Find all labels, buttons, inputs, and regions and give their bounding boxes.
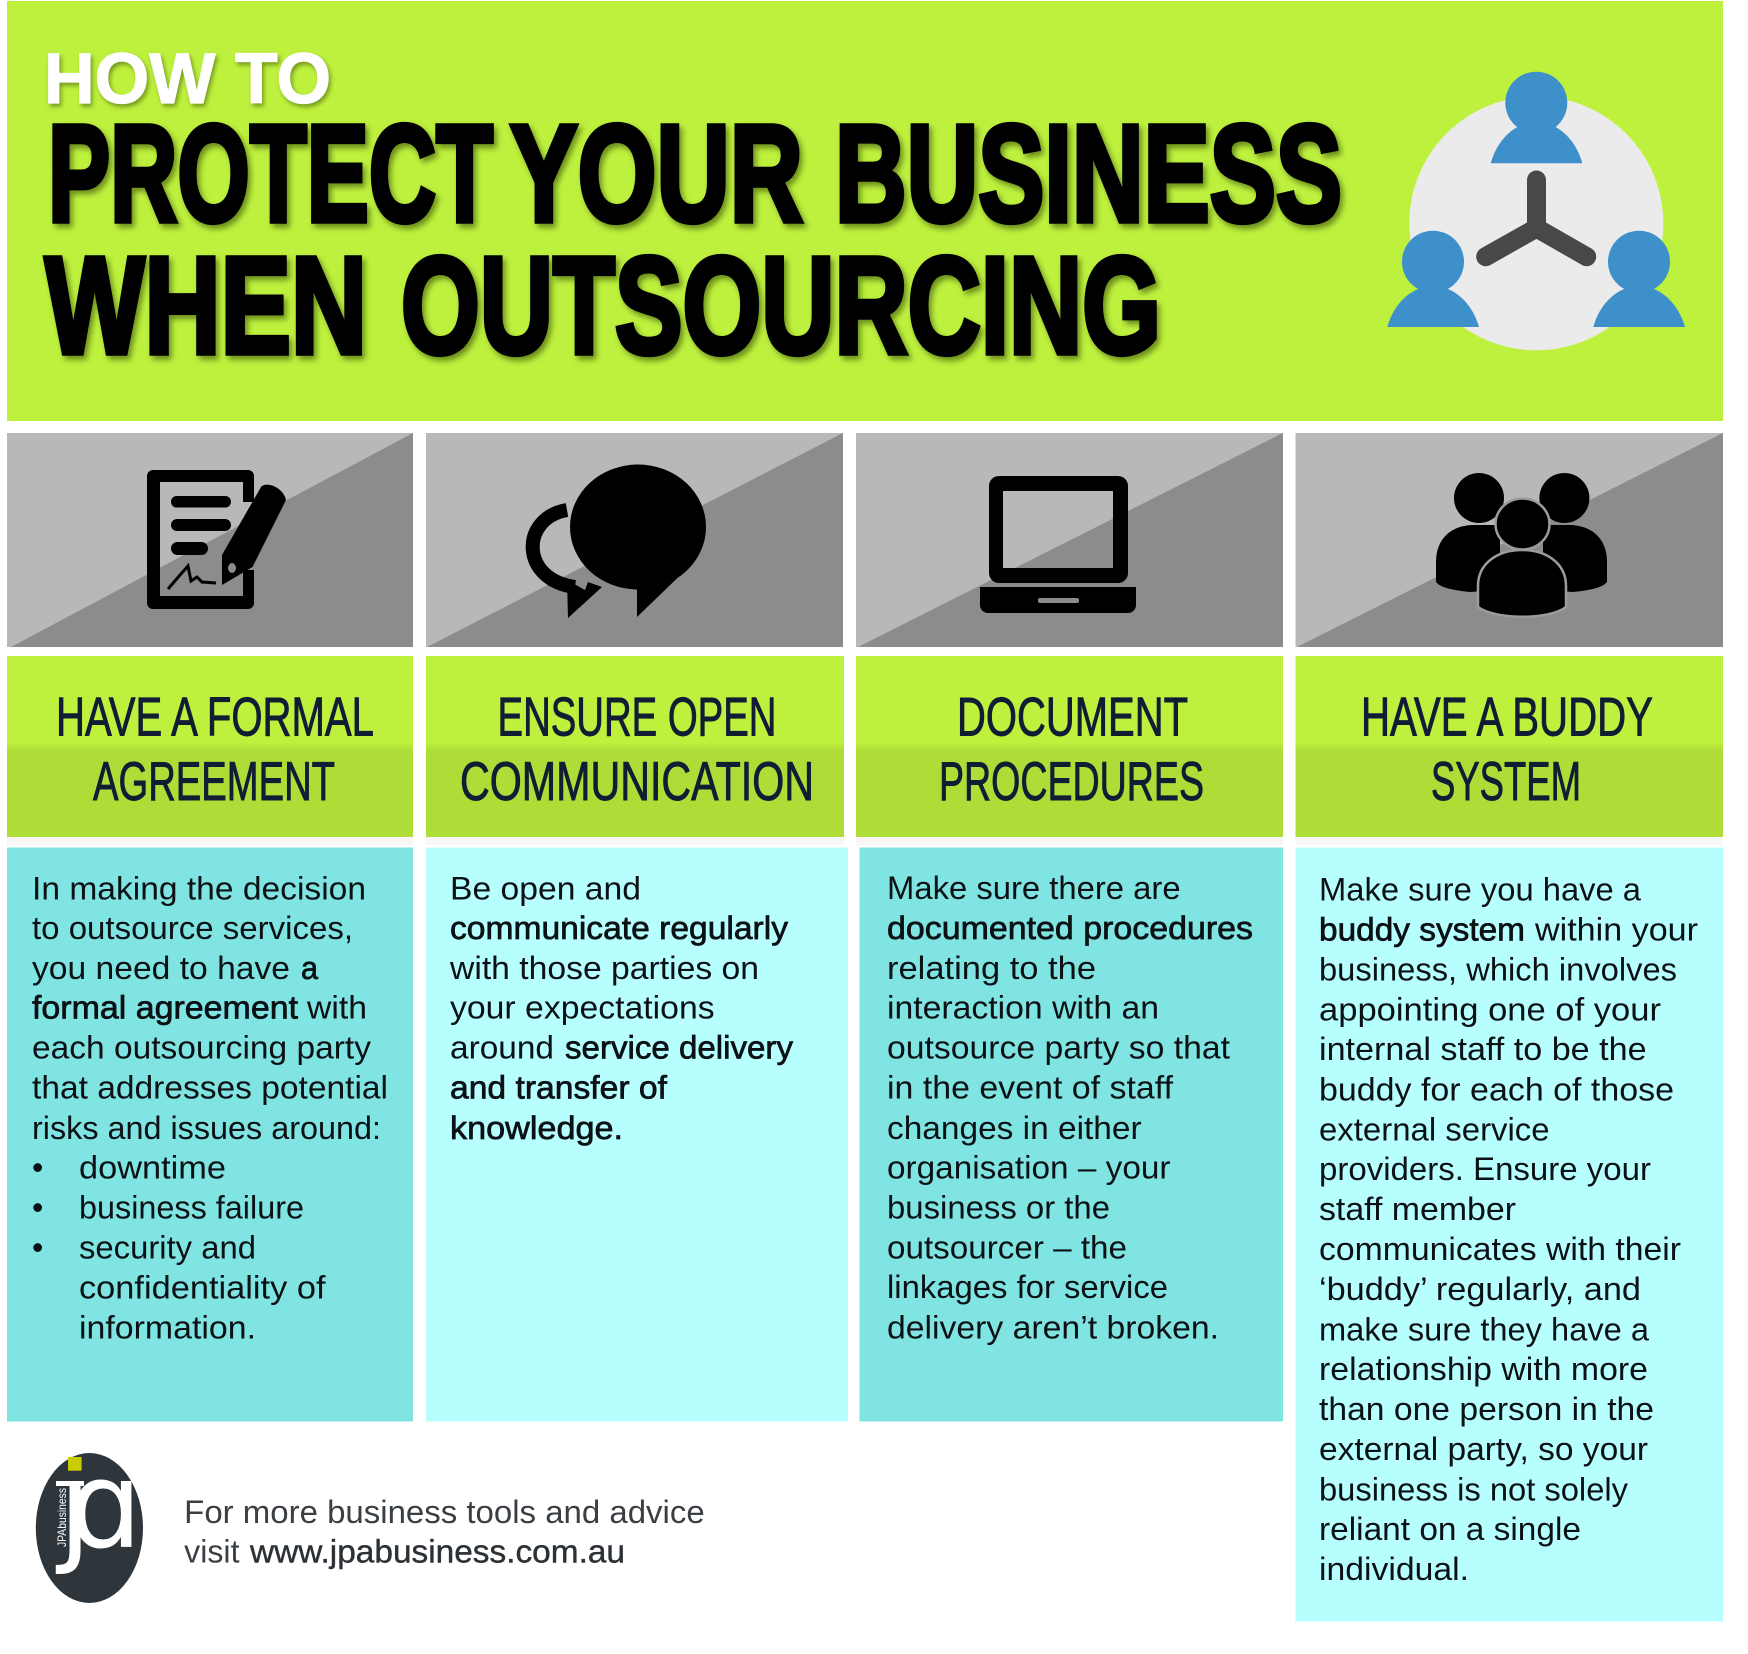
panel: document procedures text: outsource party so that: [887, 1029, 1230, 1065]
icon: group of people: [1436, 473, 1607, 617]
panel: open communication text: knowledge.: [450, 1110, 623, 1146]
panel: open communication text: your expectations: [450, 990, 715, 1026]
panel: open communication text: communicate regularly: [450, 910, 789, 946]
icon: signed document with pen: [147, 470, 286, 609]
panel: buddy system text: buddy system: [1319, 912, 1525, 948]
panel: buddy system text: individual.: [1319, 1551, 1469, 1587]
panel: buddy system text: within your: [1534, 912, 1698, 948]
panel: formal agreement text: a: [301, 950, 319, 986]
icon: laptop: [980, 476, 1136, 613]
panel: formal agreement text: each outsourcing party: [32, 1029, 372, 1065]
panel: formal agreement text: that addresses potential: [32, 1070, 388, 1106]
title: protect your business when outsourcing: OUTSOURCING: [401, 229, 1161, 383]
panel: buddy system text: ‘buddy’ regularly, and: [1319, 1271, 1641, 1307]
panel: buddy system text: appointing one of your: [1319, 991, 1661, 1027]
panel: buddy system text: make sure they have a: [1319, 1311, 1650, 1347]
logo: JPA business: j: [55, 1439, 92, 1578]
panel: document procedures text: documented procedures: [887, 910, 1253, 946]
panel: icon tile agreement: [7, 433, 413, 647]
title kicker: HOW TO: HOW TO: [44, 40, 331, 119]
panel: heading ensure open communication: ENSURE OPEN: [498, 686, 776, 748]
panel: document procedures text: business or the: [887, 1190, 1110, 1226]
bullet list: •: [32, 1150, 43, 1186]
logo: JPA business: [36, 1437, 143, 1603]
panel: icon tile procedures: [856, 433, 1283, 647]
icon: connected people network: [1387, 72, 1685, 350]
panel: open communication text: service delivery: [565, 1029, 794, 1065]
panel: heading ensure open communication: [426, 656, 844, 845]
panel: buddy system text: business is not solely: [1319, 1471, 1629, 1507]
bullet list: [32, 1150, 327, 1346]
panel: buddy system text: providers. Ensure your: [1319, 1151, 1651, 1187]
panel: heading document procedures: [856, 656, 1283, 845]
bullet list: confidentiality of: [79, 1269, 327, 1305]
panel: document procedures text: in the event of staff: [887, 1070, 1174, 1106]
footer call to action: visit: [184, 1533, 240, 1569]
panel: buddy system text: relationship with more: [1319, 1351, 1648, 1387]
panel: document procedures text: [860, 848, 1283, 1422]
panel: formal agreement text: In making the decision: [32, 870, 366, 906]
title: protect your business when outsourcing: BUSINESS: [835, 97, 1342, 251]
bullet list: security and: [79, 1229, 256, 1265]
footer call to action: For more business tools and advice: [184, 1494, 705, 1530]
panel: buddy system text: communicates with their: [1319, 1231, 1681, 1267]
panel: open communication text: with those parties on: [449, 950, 759, 986]
bullet list: •: [32, 1190, 43, 1226]
panel: icon tile buddy system: [1296, 433, 1723, 647]
panel: buddy system text: Make sure you have a: [1319, 872, 1642, 908]
panel: formal agreement text: to outsource services,: [32, 910, 353, 946]
panel: icon tile communication: [426, 433, 843, 647]
footer call to action: www.jpabusiness.com.au: [249, 1533, 625, 1569]
panel: document procedures text: relating to the: [887, 950, 1096, 986]
panel: buddy system text: external service: [1319, 1111, 1550, 1147]
panel: open communication text: and transfer of: [450, 1070, 668, 1106]
panel: buddy system text: business, which involves: [1319, 951, 1677, 987]
bullet list: •: [32, 1229, 43, 1265]
title: protect your business when outsourcing: YOUR: [510, 97, 803, 251]
bullet list: downtime: [79, 1150, 226, 1186]
panel: open communication text: Be open and: [450, 870, 641, 906]
panel: buddy system text: staff member: [1319, 1191, 1516, 1227]
panel: document procedures text: Make sure there are: [887, 870, 1181, 906]
panel: buddy system text: external party, so your: [1319, 1431, 1648, 1467]
panel: buddy system text: buddy for each of those: [1319, 1071, 1674, 1107]
panel: heading have a formal agreement: AGREEMENT: [93, 750, 335, 812]
panel: open communication text: [426, 848, 848, 1422]
bullet list: business failure: [79, 1190, 304, 1226]
panel: formal agreement text: risks and issues around:: [32, 1110, 381, 1146]
panel: header banner: [7, 1, 1723, 421]
bullet list: information.: [79, 1310, 256, 1346]
panel: document procedures text: delivery aren’t broken.: [887, 1310, 1219, 1346]
panel: buddy system text: than one person in the: [1319, 1391, 1654, 1427]
panel: heading have a formal agreement: HAVE A FORMAL: [56, 686, 374, 748]
panel: document procedures text: organisation – your: [887, 1150, 1171, 1186]
panel: document procedures text: linkages for service: [887, 1269, 1168, 1305]
panel: heading have a buddy system: SYSTEM: [1431, 750, 1581, 812]
panel: formal agreement text: with: [306, 990, 367, 1026]
logo: JPA business: JPAbusiness: [55, 1488, 69, 1547]
panel: formal agreement text: formal agreement: [32, 990, 298, 1026]
panel: heading ensure open communication: COMMUNICATION: [460, 750, 814, 812]
panel: heading have a buddy system: [1296, 656, 1723, 845]
title: protect your business when outsourcing: WHEN: [45, 229, 367, 383]
panel: heading document procedures: DOCUMENT: [957, 686, 1188, 748]
logo: JPA business: ɑ: [68, 1437, 142, 1576]
panel: document procedures text: interaction with an: [887, 990, 1159, 1026]
panel: buddy system text: [1296, 848, 1723, 1622]
panel: buddy system text: reliant on a single: [1319, 1511, 1581, 1547]
panel: heading have a formal agreement: [7, 656, 413, 845]
panel: document procedures text: outsourcer – the: [887, 1229, 1127, 1265]
panel: document procedures text: changes in either: [887, 1110, 1142, 1146]
icon: speech bubble with arrow: [533, 464, 706, 618]
panel: formal agreement text: [7, 848, 413, 1422]
panel: heading document procedures: PROCEDURES: [939, 750, 1204, 812]
panel: buddy system text: internal staff to be the: [1319, 1031, 1647, 1067]
footer call to action: [184, 1494, 705, 1569]
panel: formal agreement text: you need to have: [32, 950, 290, 986]
title: protect your business when outsourcing: PROTECT: [48, 97, 493, 251]
title: protect your business when outsourcing: [45, 97, 1342, 383]
panel: open communication text: around: [450, 1029, 554, 1065]
